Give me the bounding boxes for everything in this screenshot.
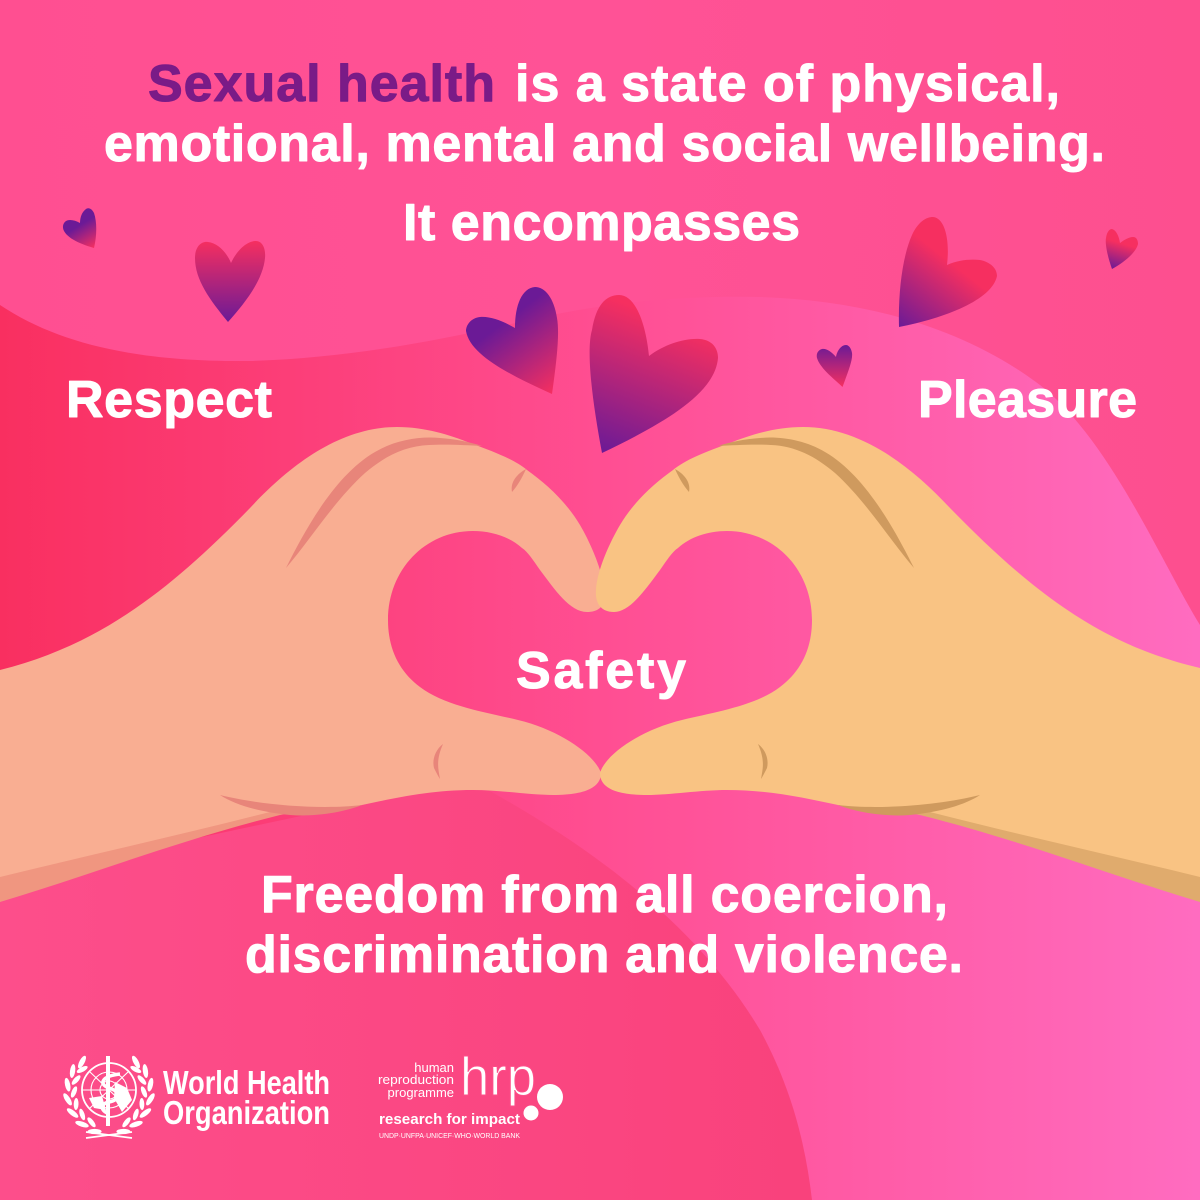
closing statement: discrimination and violence. (245, 926, 963, 984)
crease: fingertip (675, 469, 689, 492)
title: Sexual health (148, 55, 495, 113)
crease: thumb (286, 438, 482, 568)
logo: WHO wordmark: World Health (163, 1064, 330, 1101)
icon: heart far left (63, 208, 96, 248)
icon: heart centre left (466, 287, 558, 394)
crease: thumb (718, 438, 914, 568)
logo: HRP: research for impact (379, 1112, 520, 1128)
closing statement: Freedom from all coercion, (261, 866, 948, 924)
title (104, 55, 1105, 173)
right hand (596, 427, 1200, 902)
logo: HRP: UNDP·UNFPA·UNICEF·WHO·WORLD BANK (379, 1133, 520, 1140)
crease: fingertip (512, 469, 526, 492)
icon: heart far right (1106, 229, 1138, 269)
crease: lower knuckle (758, 744, 768, 779)
title: emotional, mental and social wellbeing. (104, 115, 1105, 173)
icon: heart small centre right (817, 345, 852, 387)
title: is a state of physical, (515, 55, 1060, 113)
left hand (0, 427, 601, 902)
label: Pleasure: Pleasure (918, 371, 1137, 429)
crease: palm (220, 795, 362, 815)
icon: heart centre (590, 295, 718, 453)
logo: HRP: programme (388, 1085, 454, 1100)
crease: lower knuckle (433, 744, 443, 779)
logo: WHO wordmark (163, 1064, 330, 1131)
logo: WHO emblem (62, 1055, 156, 1138)
logo: HRP (378, 1047, 563, 1140)
icon: heart left (195, 241, 265, 322)
crease: palm (838, 795, 980, 815)
logo: HRP: reproduction (378, 1072, 454, 1087)
icon: heart top right (899, 217, 997, 327)
logo: HRP: human (414, 1060, 454, 1075)
logo: WHO wordmark: Organization (163, 1094, 330, 1131)
logo: HRP: hrp (460, 1047, 536, 1107)
subtitle: It encompasses (403, 194, 800, 252)
closing statement (245, 866, 963, 984)
label: Respect: Respect (66, 371, 272, 429)
label: Safety: Safety (516, 642, 686, 700)
